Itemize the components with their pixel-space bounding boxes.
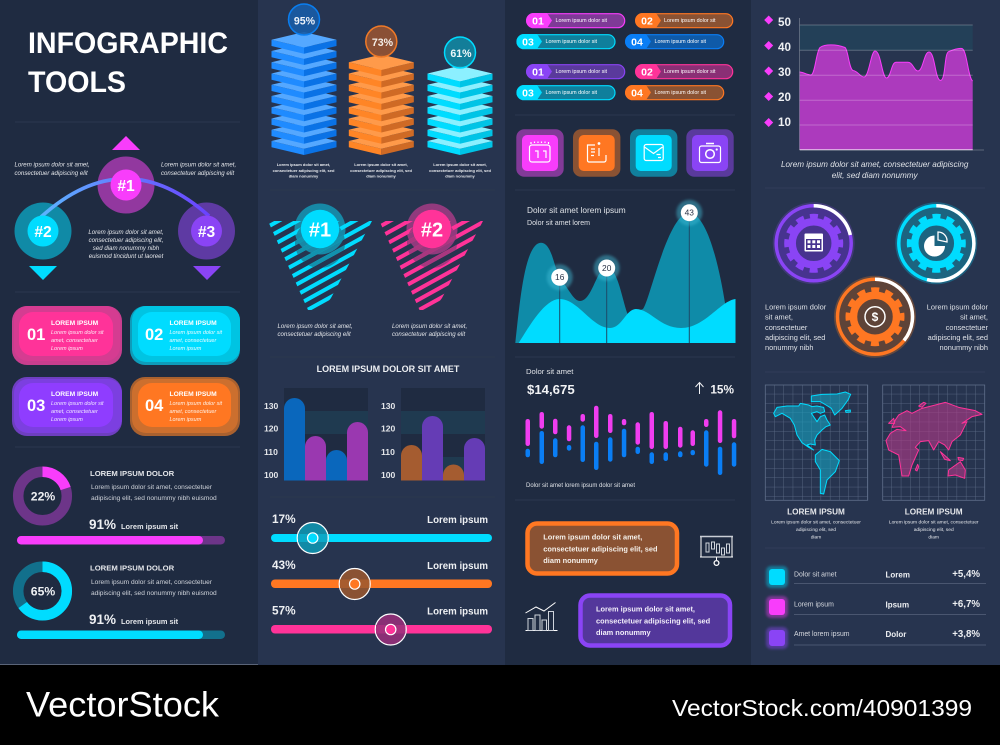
text: heading and body: Lorem ipsum dolor sit amet, consectetuer	[91, 579, 213, 586]
text: heading and body	[90, 564, 217, 597]
pill row 1	[526, 13, 733, 28]
bar chart left: 130	[264, 401, 279, 411]
area series	[800, 45, 973, 150]
slider 17%: 17%	[272, 512, 296, 526]
card 04: Lorem ipsum	[170, 417, 202, 423]
panel: pill labels	[516, 13, 733, 100]
panel: numbered cards	[12, 306, 240, 436]
card 04	[130, 377, 240, 436]
text: centre note: euismod tincidunt ut laoreet	[89, 253, 164, 260]
panel: sliders	[271, 512, 492, 645]
donut chart 65%	[18, 567, 67, 615]
bar chart left: 110	[264, 447, 278, 457]
blue stack 95%	[272, 4, 336, 155]
panel: 3D stacks	[272, 4, 492, 178]
slider 57%: Lorem ipsum	[427, 606, 488, 618]
card 04: 04	[145, 397, 164, 415]
text: right gear note: adipiscing elit, sed	[928, 333, 988, 342]
pill row 4: Lorem ipsum dolor sit	[546, 90, 598, 96]
text: right map label: LOREM IPSUM	[905, 508, 963, 516]
map: Europe Africa Asia	[883, 385, 985, 500]
pill row 4: 03	[522, 88, 534, 100]
text: left gear note: Lorem ipsum dolor	[765, 302, 827, 312]
pill row 2: 04	[631, 37, 643, 49]
back area	[515, 213, 736, 343]
row purple: Amet lorem ipsum	[794, 631, 850, 638]
row magenta	[766, 596, 986, 618]
pill row 2: Lorem ipsum dolor sit	[546, 39, 598, 45]
text: right note: consectetuer adipiscing elit	[161, 170, 234, 177]
row magenta: Ipsum	[886, 600, 909, 610]
card 03: LOREM IPSUM	[51, 391, 99, 398]
text: heading and body	[90, 469, 217, 502]
text: stat heading: Dolor sit amet	[526, 367, 574, 376]
callout orange: diam nonummy	[543, 556, 599, 565]
node #2: #2	[34, 224, 52, 241]
pill row 3: 02	[641, 67, 653, 79]
pill row 3: Lorem ipsum dolor sit	[556, 69, 608, 75]
axis labels: 20	[778, 91, 792, 104]
text: heading and body: adipiscing elit, sed nonummy nibh euismod	[91, 495, 217, 502]
donut chart 22%	[18, 472, 67, 520]
node #1	[110, 170, 142, 200]
cyan stack 61%: 61%	[450, 48, 472, 60]
text: heading and body: Lorem ipsum dolor sit amet, consectetuer	[91, 484, 213, 491]
callout orange	[528, 524, 677, 574]
front area	[519, 299, 736, 343]
map: Americas	[765, 385, 868, 500]
bar chart left	[264, 388, 368, 480]
gear: dollar	[836, 278, 914, 355]
progress stat 91%: Lorem ipsum sit	[121, 522, 179, 531]
slider 17%	[271, 512, 492, 554]
marker 16	[547, 264, 573, 343]
text: funnel captions: Lorem ipsum dolor sit amet,	[278, 323, 353, 330]
text: heading and body: adipiscing elit, sed nonummy nibh euismod	[91, 590, 217, 597]
row purple: Dolor	[886, 630, 906, 639]
card 02	[130, 306, 240, 365]
card 04: amet, consectetuer	[170, 409, 217, 415]
panel: gears	[765, 205, 989, 355]
text: stat caption: Dolor sit amet lorem ipsum dolor sit amet	[526, 483, 635, 489]
icon: down triangle cyan	[29, 266, 57, 280]
text: funnel captions	[278, 323, 467, 338]
gear: dollar: $	[872, 310, 879, 324]
panel: donut 65% block	[17, 564, 225, 639]
panel: magenta area chart	[764, 16, 984, 180]
pill row 2: 03	[522, 37, 534, 49]
slider 17%: Lorem ipsum	[427, 515, 488, 526]
card 02: amet, consectetuer	[170, 338, 217, 344]
node #3	[191, 216, 222, 246]
icon: down triangle purple	[193, 266, 221, 280]
node circles outer	[14, 156, 235, 260]
row cyan: +5,4%	[952, 569, 980, 580]
text: right gear note: Lorem ipsum dolor	[927, 302, 989, 312]
text: centre note: consectetuer adipiscing elit,	[89, 237, 163, 244]
panel: bar charts	[264, 364, 485, 480]
axis labels: 10	[778, 116, 792, 129]
text: left note: Lorem ipsum dolor sit amet,	[14, 162, 90, 168]
change indicator	[696, 382, 734, 396]
blue stack 95%: 95%	[294, 16, 316, 28]
gear: calendar	[775, 205, 852, 282]
row cyan: Lorem	[886, 571, 910, 580]
pill row 3: Lorem ipsum dolor sit	[664, 69, 716, 75]
text: stack captions: Lorem ipsum dolor sit amet,	[433, 162, 487, 167]
arc connector	[41, 179, 209, 217]
bar chart right: 120	[381, 424, 396, 434]
row magenta: Lorem ipsum	[794, 602, 834, 608]
gear: pie	[898, 205, 975, 282]
text: stack captions: consectetuer adipiscing elit, sed	[273, 168, 335, 173]
orange stack 73%	[349, 26, 414, 155]
icon: calendar tile	[516, 129, 564, 177]
text: right map label: adipiscing elit, sed	[914, 527, 954, 533]
card 02: 02	[145, 326, 163, 344]
progress stat 91%: 91%	[89, 517, 116, 532]
funnel #1	[269, 204, 372, 310]
text: heading and body: LOREM IPSUM DOLOR	[90, 469, 175, 478]
text: left gear note: consectetuer	[765, 323, 808, 332]
text: chart titles: Dolor sit amet lorem ipsum	[527, 205, 626, 215]
node #3: #3	[198, 224, 215, 241]
pill row 1: 01	[532, 16, 544, 28]
text: left map label: LOREM IPSUM	[787, 508, 845, 516]
callout purple: Lorem ipsum dolor sit amet,	[596, 604, 695, 614]
slider 43%: 43%	[272, 558, 296, 572]
card 01: amet, consectetuer	[51, 338, 99, 344]
bar chart right	[381, 388, 485, 480]
text: left map label: adipiscing elit, sed	[796, 527, 836, 533]
funnel #2	[380, 204, 483, 310]
card 04: Lorem ipsum dolor sit	[170, 401, 223, 407]
axis labels: 50	[778, 16, 792, 29]
text: right map label: Lorem ipsum dolor sit amet, consectetuer	[889, 520, 979, 526]
pill row 3: 01	[532, 67, 544, 79]
axis labels: 40	[778, 41, 792, 54]
footer image id: VectorStock.com/40901399	[672, 695, 972, 721]
card 02: Lorem ipsum	[170, 346, 202, 352]
text: funnel captions: Lorem ipsum dolor sit amet,	[392, 323, 467, 330]
card 01: LOREM IPSUM	[51, 320, 99, 327]
marker 20: 20	[602, 263, 612, 273]
row purple	[766, 627, 986, 649]
marker 16: 16	[555, 272, 565, 282]
text: stack captions: Lorem ipsum dolor sit amet,	[277, 162, 330, 167]
node #2	[28, 216, 58, 246]
text: right map label	[889, 508, 979, 540]
title	[28, 27, 228, 99]
footer brand: VectorStock	[26, 685, 219, 725]
cyan stack 61%	[428, 37, 492, 155]
title: INFOGRAPHIC	[28, 27, 228, 60]
axis labels	[764, 16, 792, 129]
panel: legend table	[766, 566, 986, 649]
progress stat 91%: 91%	[89, 612, 116, 627]
text: stack captions: consectetuer adipiscing elit, sed	[429, 168, 491, 173]
footer bar	[0, 665, 1000, 745]
text: heading and body: LOREM IPSUM DOLOR	[90, 564, 175, 572]
grid and axes	[800, 18, 984, 150]
text: right map label: diam	[928, 534, 939, 540]
progress stat 91%	[17, 612, 225, 639]
text: left gear note: adipiscing elit, sed	[765, 333, 825, 342]
bar chart right: 110	[381, 447, 395, 457]
icon: note tile	[573, 129, 620, 177]
chart: split bars	[526, 406, 736, 475]
marker 20	[594, 255, 620, 343]
pill row 4	[516, 85, 724, 100]
bar chart right: 100	[381, 470, 396, 480]
value: $14,675	[527, 382, 575, 397]
card 03	[12, 377, 122, 436]
text: centre note: sed diam nonummy nibh	[93, 245, 160, 252]
donut chart 22%: 22%	[31, 490, 55, 504]
text: chart caption: Lorem ipsum dolor sit amet, consectetuer adipiscing	[781, 160, 969, 169]
text: right gear note: consectetuer	[946, 323, 989, 332]
text: left gear note: nonummy nibh	[765, 343, 813, 352]
card 01: Lorem ipsum dolor sit	[51, 330, 104, 336]
card 02: LOREM IPSUM	[170, 320, 217, 327]
band	[800, 25, 973, 50]
marker 43	[676, 200, 702, 343]
pill row 3	[526, 64, 733, 79]
area outline	[800, 45, 973, 81]
card 04: LOREM IPSUM	[170, 391, 217, 398]
panel: mountain area chart	[515, 200, 736, 343]
progress stat 91%: Lorem ipsum sit	[121, 617, 179, 626]
slider 43%: Lorem ipsum	[427, 561, 488, 572]
slider 57%: 57%	[272, 604, 296, 618]
funnel #2: #2	[421, 220, 443, 242]
pill row 2: Lorem ipsum dolor sit	[654, 39, 707, 45]
card 01: 01	[27, 326, 45, 344]
row cyan: Dolor sit amet	[794, 572, 837, 579]
icon: growth bars	[526, 602, 558, 630]
pill row 1: 02	[641, 16, 653, 28]
card 01: Lorem ipsum	[51, 346, 83, 352]
text: chart titles	[527, 205, 626, 227]
text: chart caption: elit, sed diam nonummy	[832, 171, 919, 180]
panel: donut 22% block	[17, 469, 225, 544]
bar chart left: 120	[264, 424, 279, 434]
text: chart titles: Dolor sit amet lorem	[527, 220, 590, 227]
pill row 4: 04	[631, 88, 643, 100]
text: stack captions: Lorem ipsum dolor sit amet,	[354, 162, 408, 167]
pill row 1: Lorem ipsum dolor sit	[664, 18, 716, 24]
card 03: 03	[27, 397, 45, 415]
pill row 2	[516, 34, 724, 49]
text: right gear note: sit amet,	[960, 313, 988, 322]
panel: arc diagram with three nodes	[14, 136, 236, 280]
text: stack captions: diam nonummy	[289, 174, 319, 178]
text: right gear note: nonummy nibh	[940, 343, 988, 352]
slider 57%	[271, 604, 492, 645]
heading: LOREM IPSUM DOLOR SIT AMET	[317, 364, 460, 374]
marker 43: 43	[685, 208, 694, 218]
slider 43%	[271, 558, 492, 600]
callout orange: Lorem ipsum dolor sit amet,	[543, 532, 642, 542]
callout purple: consectetuer adipiscing elit, sed	[596, 616, 711, 626]
row cyan	[766, 566, 986, 588]
text: centre note: Lorem ipsum dolor sit amet,	[88, 229, 164, 236]
icon: presentation board	[700, 536, 733, 565]
bar chart right: 130	[381, 401, 396, 411]
card 03: Lorem ipsum	[51, 417, 83, 423]
row magenta: +6,7%	[952, 599, 980, 610]
card 02: Lorem ipsum dolor sit	[170, 330, 223, 336]
text: stack captions: diam nonummy	[445, 174, 476, 178]
text: stack captions: consectetuer adipiscing elit, sed	[350, 168, 412, 173]
callout purple: diam nonummy	[596, 628, 652, 637]
card 01	[12, 306, 122, 365]
icon: mail tile	[630, 129, 677, 177]
change indicator: 15%	[710, 382, 734, 396]
panel: callouts	[526, 524, 733, 646]
text: left map label: Lorem ipsum dolor sit amet, consectetuer	[771, 520, 861, 526]
panel: striped funnels	[269, 204, 483, 338]
panel: maps	[765, 385, 985, 540]
text: stack captions: diam nonummy	[366, 174, 397, 178]
card 03: Lorem ipsum dolor sit	[51, 401, 104, 407]
callout purple	[580, 596, 730, 646]
pill row 4: Lorem ipsum dolor sit	[654, 90, 707, 96]
row purple: +3,8%	[952, 629, 980, 640]
text: funnel captions: consectetuer adipiscing elit	[278, 331, 351, 338]
donut chart 65%: 65%	[31, 584, 55, 598]
callout orange: consectetuer adipiscing elit, sed	[543, 544, 658, 554]
text: right note: Lorem ipsum dolor sit amet,	[161, 162, 236, 168]
axis labels: 30	[778, 66, 792, 79]
text: funnel captions: consectetuer adipiscing elit	[392, 331, 465, 338]
text: left note: consectetuer adipiscing elit	[14, 170, 88, 177]
panel: split bar stat	[526, 367, 736, 489]
progress stat 91%	[17, 517, 225, 544]
text: stack captions	[273, 162, 491, 178]
icon: camera tile	[686, 129, 734, 177]
orange stack 73%: 73%	[372, 37, 394, 49]
icon: up triangle	[112, 136, 140, 150]
text: left gear note: sit amet,	[765, 313, 793, 322]
text: left map label: diam	[811, 534, 821, 540]
card 03: amet, consectetuer	[51, 409, 99, 415]
bar chart left: 100	[264, 470, 279, 480]
panel: icon tiles	[516, 129, 734, 177]
funnel #1: #1	[309, 220, 331, 242]
node #1: #1	[117, 178, 135, 195]
text: left map label	[771, 508, 861, 540]
title: TOOLS	[28, 66, 126, 99]
pill row 1: Lorem ipsum dolor sit	[556, 18, 608, 24]
